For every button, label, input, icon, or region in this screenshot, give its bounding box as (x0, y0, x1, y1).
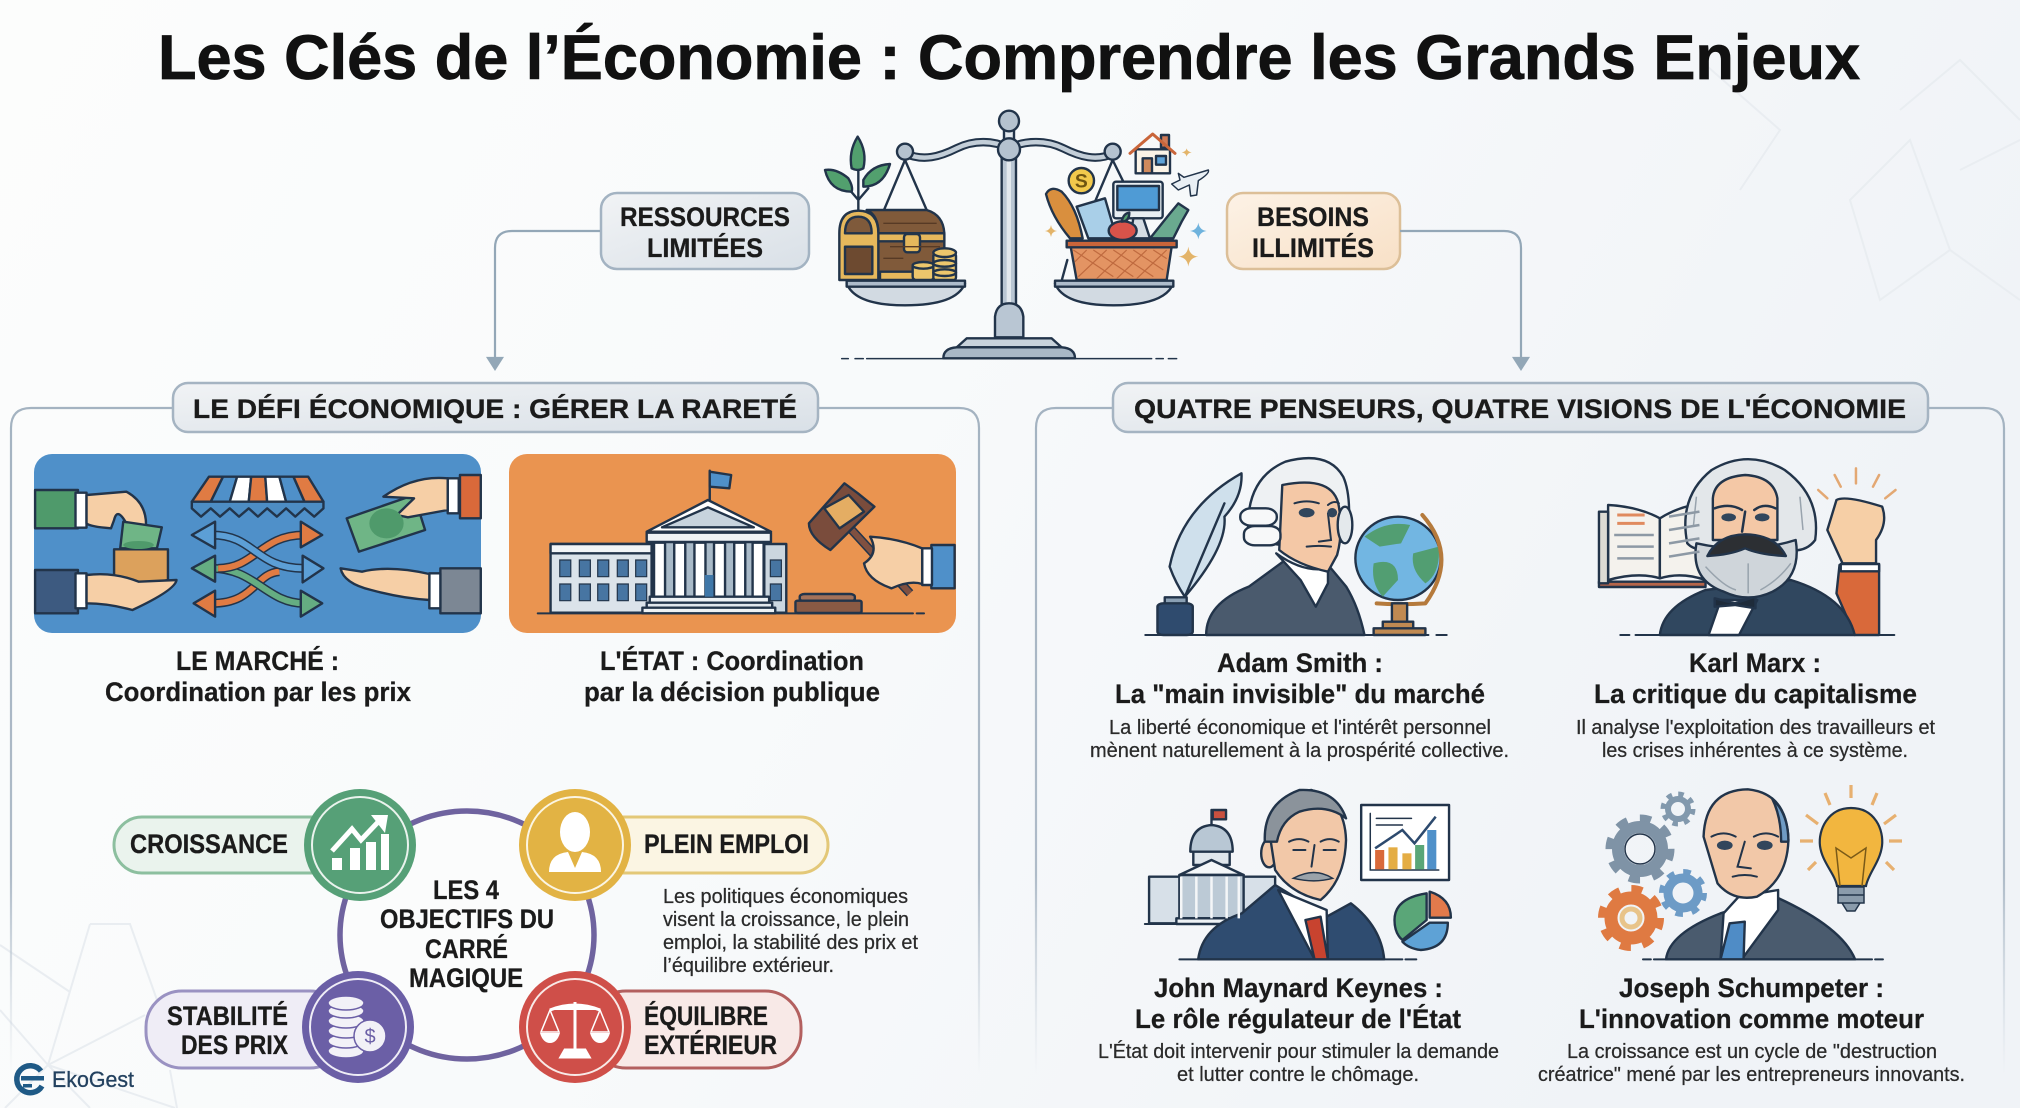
heading: quatre penseurs (1113, 383, 1928, 432)
chest (867, 210, 944, 233)
text: karl marx: Il analyse l'exploitation des travailleurs et (1576, 716, 1935, 739)
pill: équilibre extérieur: EXTÉRIEUR (644, 1029, 777, 1060)
panel: quatre penseurs (1036, 383, 2004, 1086)
center text: MAGIQUE (409, 963, 523, 993)
text: john maynard keynes: L'État doit intervenir pour stimuler la demande (1098, 1040, 1499, 1063)
portrait: karl marx (1599, 459, 1896, 635)
pill: stabilité des prix: STABILITÉ (167, 1000, 288, 1031)
hair back (1248, 458, 1349, 547)
text: karl marx: La critique du capitalisme (1594, 679, 1917, 709)
pill: stabilité des prix: DES PRIX (181, 1030, 288, 1060)
text: joseph schumpeter: La croissance est un cycle de "destruction (1567, 1040, 1937, 1063)
caption: l'état (584, 645, 880, 707)
bottle (1150, 203, 1188, 238)
chart (1361, 805, 1449, 880)
label: besoins illimités (1227, 193, 1400, 269)
basket (1071, 247, 1172, 280)
hair (1685, 459, 1816, 550)
heading: le défi économique: LE DÉFI ÉCONOMIQUE : GÉRER LA RARETÉ (193, 393, 797, 424)
suit (1198, 885, 1384, 959)
text: joseph schumpeter: Joseph Schumpeter : (1619, 973, 1884, 1003)
panel: le défi économique (11, 383, 979, 1083)
coat (1660, 580, 1855, 635)
label: ressources limitées (601, 193, 809, 269)
beard (1695, 540, 1797, 597)
ground line (842, 358, 1177, 360)
text: adam smith: La liberté économique et l'intérêt personnel (1109, 716, 1491, 739)
bulb (1800, 785, 1902, 911)
label: besoins illimités: ILLIMITÉS (1252, 232, 1374, 263)
text: joseph schumpeter (1538, 973, 1965, 1086)
ink (1157, 603, 1193, 635)
feather (1170, 473, 1242, 597)
text: politiques économiques: emploi, la stabilité des prix et (663, 931, 918, 954)
coin (1069, 168, 1094, 193)
center text (380, 875, 554, 993)
pill: stabilité des prix (146, 991, 346, 1068)
plane (1172, 170, 1209, 196)
face (1279, 483, 1341, 572)
text: john maynard keynes: Le rôle régulateur de l'État (1135, 1003, 1461, 1034)
heading: le défi économique (173, 383, 818, 432)
icon: croissance (304, 789, 416, 901)
pill: croissance: CROISSANCE (130, 829, 288, 859)
center text: OBJECTIFS DU (380, 904, 554, 934)
pill: croissance (114, 817, 344, 873)
caption: l'état: L'ÉTAT : Coordination (600, 645, 864, 676)
jar (1077, 198, 1117, 238)
portrait: joseph schumpeter (1602, 785, 1902, 959)
apple (1109, 221, 1137, 240)
icon: balance ressources et besoins (825, 111, 1209, 359)
awning (192, 477, 223, 502)
coat (1206, 560, 1364, 635)
icon: plein emploi (519, 789, 631, 901)
gears (1602, 794, 1704, 947)
icon: stabilité des prix: $ (364, 1026, 376, 1048)
icon: équilibre extérieur (519, 971, 631, 1083)
arrow: besoins vers penseurs (1400, 231, 1528, 369)
mustache (1707, 534, 1786, 556)
text: karl marx (1576, 648, 1935, 762)
caption: l'état: par la décision publique (584, 677, 880, 707)
text: joseph schumpeter: L'innovation comme moteur (1579, 1004, 1924, 1034)
portrait: john maynard keynes (1145, 790, 1451, 959)
text: adam smith (1090, 648, 1509, 762)
plant (848, 168, 868, 210)
text: politiques économiques: Les politiques économiques (663, 885, 908, 908)
bread (1046, 189, 1083, 238)
capitol (1210, 810, 1213, 825)
icon: stabilité des prix (302, 971, 414, 1083)
caption: le marché: Coordination par les prix (105, 677, 411, 707)
text: politiques économiques (663, 885, 918, 977)
label: ressources limitées: RESSOURCES (620, 202, 790, 232)
chart: carré magique (114, 789, 828, 1083)
head (1269, 790, 1346, 900)
text: john maynard keynes (1098, 973, 1499, 1086)
label: ressources limitées: LIMITÉES (647, 232, 763, 263)
pill: plein emploi (590, 817, 828, 873)
text: adam smith: mènent naturellement à la prospérité collective. (1090, 739, 1509, 762)
pill: équilibre extérieur: ÉQUILIBRE (644, 1000, 768, 1031)
heading: quatre penseurs: QUATRE PENSEURS, QUATRE VISIONS DE L'ÉCONOMIE (1134, 393, 1906, 424)
ring (340, 811, 594, 1059)
pie (1395, 893, 1427, 940)
center text: LES 4 (433, 875, 499, 905)
label: besoins illimités: BESOINS (1257, 202, 1369, 232)
arrow: ressources vers défi (488, 231, 600, 369)
icon: balance ressources et besoins: S (1075, 172, 1088, 193)
arm (1836, 565, 1879, 635)
caption: le marché: LE MARCHÉ : (176, 645, 339, 676)
text: politiques économiques: visent la croissance, le plein (663, 908, 909, 931)
text: john maynard keynes: John Maynard Keynes : (1154, 973, 1443, 1003)
illustration: le marché (34, 454, 481, 633)
caption: le marché (105, 645, 411, 707)
house (1161, 135, 1169, 148)
text: karl marx: les crises inhérentes à ce système. (1602, 739, 1908, 762)
title: Les Clés de l’Économie : Comprendre les Grands Enjeux (158, 23, 1860, 93)
text: adam smith: Adam Smith : (1217, 648, 1383, 678)
pill: plein emploi: PLEIN EMPLOI (644, 829, 809, 859)
sparkles (1045, 148, 1207, 267)
monitor (1113, 182, 1163, 218)
face (1713, 475, 1777, 540)
book (1599, 582, 1706, 587)
text: john maynard keynes: et lutter contre le chômage. (1177, 1063, 1419, 1086)
text: karl marx: Karl Marx : (1689, 648, 1821, 678)
text: adam smith: La "main invisible" du marché (1115, 679, 1485, 709)
center text: CARRÉ (425, 933, 508, 964)
illustration: l'état (509, 454, 956, 633)
text: politiques économiques: l’équilibre extérieur. (663, 954, 834, 977)
text: joseph schumpeter: créatrice" mené par les entrepreneurs innovants. (1538, 1063, 1965, 1086)
logo: ekogest (17, 1066, 134, 1093)
ear (1261, 839, 1277, 867)
globe (1355, 517, 1441, 600)
portrait: adam smith (1145, 458, 1447, 635)
pill: équilibre extérieur (590, 991, 801, 1068)
logo: ekogest: EkoGest (52, 1067, 134, 1092)
